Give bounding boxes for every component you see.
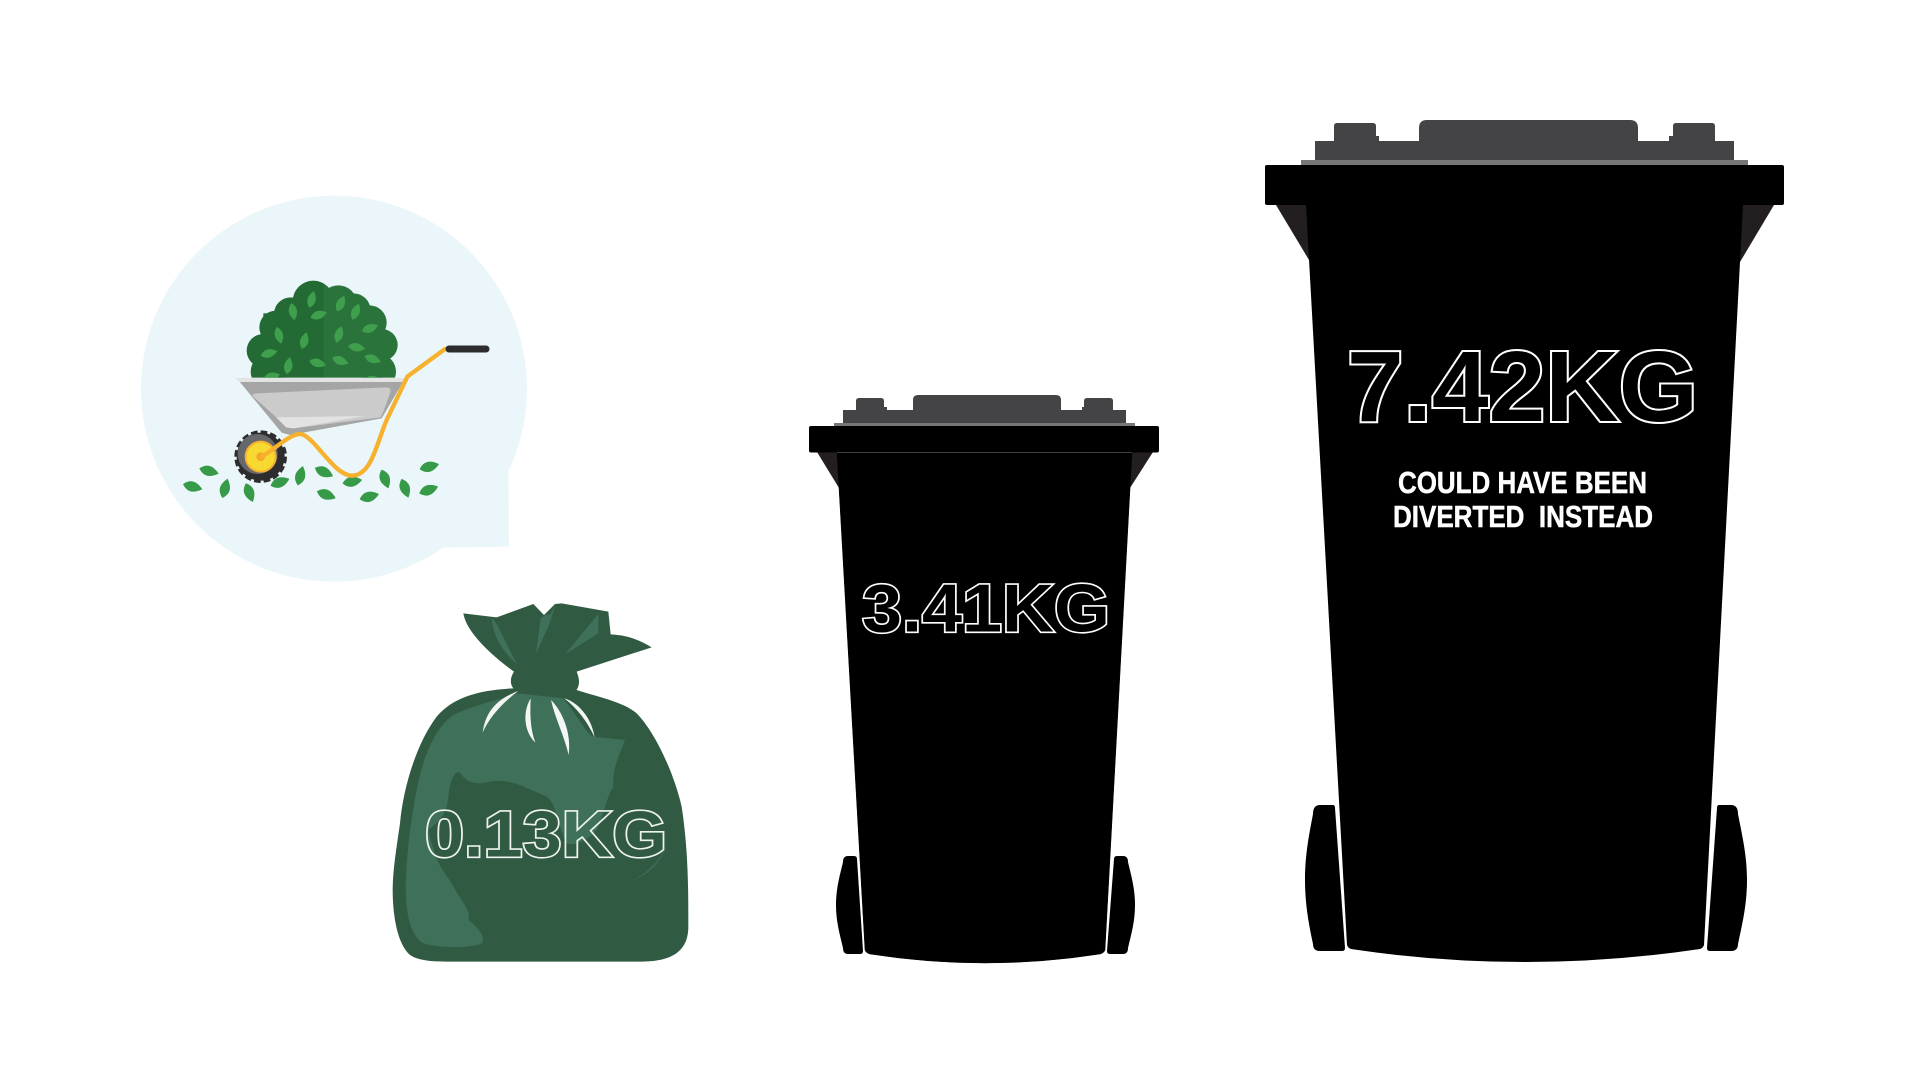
text: large bin weight: 7.42KG — [1347, 331, 1698, 443]
panel: green bag — [393, 603, 688, 962]
icon: barrow tray — [235, 378, 405, 435]
text: bag weight: 0.13KG — [425, 798, 667, 870]
bag neck and top — [463, 603, 652, 694]
bin wheels — [836, 856, 1135, 954]
icon: barrow handle — [262, 349, 486, 476]
icon: bush — [247, 281, 398, 389]
bag highlight lower right — [628, 847, 667, 882]
speech bubble background — [141, 196, 527, 582]
bag white creases — [483, 691, 595, 755]
bin flares — [1276, 205, 1774, 262]
bin rim — [809, 426, 1159, 452]
panel: wheelbarrow illustration — [141, 196, 527, 582]
bin wheels — [1305, 805, 1747, 951]
bag top folds — [492, 603, 598, 664]
bin flares — [817, 452, 1153, 488]
bin lid — [834, 395, 1135, 427]
text: could have been diverted instead — [1393, 465, 1653, 534]
panel: medium bin — [809, 395, 1159, 963]
text: could have been diverted instead: DIVERTED INSTEAD — [1393, 499, 1653, 534]
text: medium bin weight: 3.41KG — [862, 570, 1110, 646]
bag body — [393, 688, 688, 962]
bin body — [1306, 205, 1743, 962]
panel: large bin — [1265, 120, 1784, 962]
bag highlight — [406, 693, 625, 947]
icon: leaves on the ground — [182, 459, 440, 504]
bin lid — [1301, 120, 1748, 166]
bin rim — [1265, 165, 1784, 205]
bin body — [837, 452, 1132, 963]
text: could have been diverted instead: COULD HAVE BEEN — [1398, 465, 1647, 500]
icon: barrow wheel — [236, 432, 285, 481]
